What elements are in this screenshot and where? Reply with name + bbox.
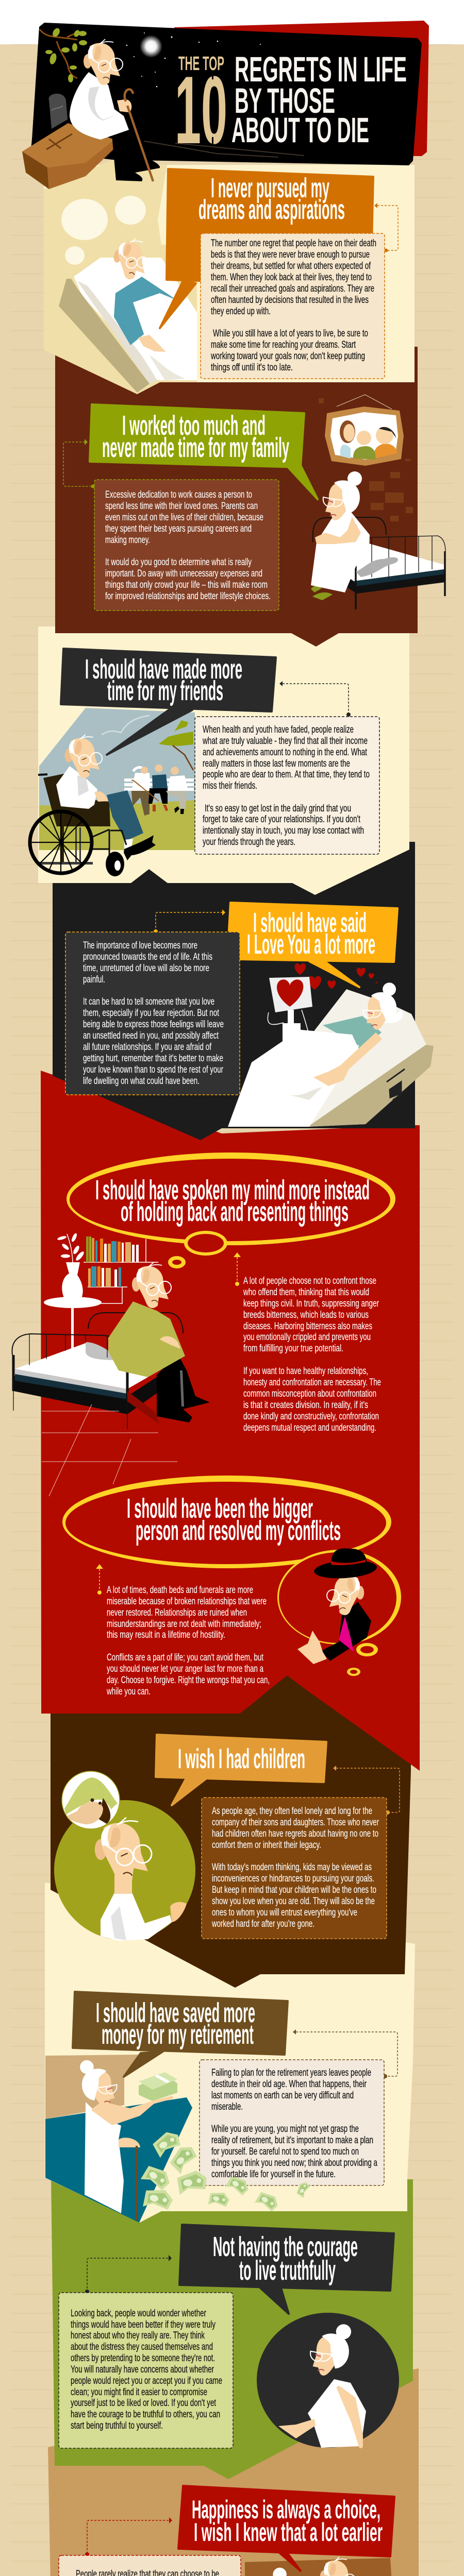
body text: The importance of love becomes more — [83, 940, 197, 951]
body text: things you think you need now; think about providing a — [211, 2158, 377, 2168]
body text: The number one regret that people have on their death — [211, 238, 376, 249]
stencil cuts in the number 10 — [212, 72, 213, 144]
regret 6 — [62, 1476, 401, 1697]
panel: regret 9 background — [51, 2177, 413, 2479]
floor lines — [42, 1404, 177, 1496]
thought bubble: regret 5 — [67, 1153, 395, 1268]
body text: Failing to plan for the retirement years leaves people — [211, 2067, 371, 2078]
body text: they ended up with. — [211, 306, 271, 317]
body text: Looking back, people would wonder whether — [71, 2308, 206, 2319]
regret 8: I should have saved more — [96, 1997, 255, 2028]
text box — [200, 2060, 384, 2185]
body text: beds is that they were never brave enough to pursue — [211, 249, 370, 260]
text box — [59, 2293, 233, 2448]
body text: others by pretending to be someone they're not. — [71, 2353, 215, 2364]
body text: time, unreturned of love will also be more — [83, 963, 209, 974]
body text: you emotionally crippled and prevents you — [243, 1332, 371, 1343]
body text: this may result in a lifetime of hostility. — [107, 1630, 225, 1640]
illustration: wall blocks — [245, 2558, 411, 2576]
body text: If you want to have healthy relationships, — [243, 1366, 368, 1377]
regret 1 — [59, 169, 398, 393]
body text: As people age, they often feel lonely and long for the — [212, 1806, 372, 1817]
regret 3: I should have made more — [85, 654, 242, 685]
speech bubble: regret 10 — [178, 2486, 394, 2571]
illustration: hospital bed — [228, 982, 434, 1127]
connector arrow — [96, 1564, 103, 1595]
regret 7 — [54, 1735, 400, 1941]
body text: things off until it's too late. — [211, 362, 293, 373]
text box — [195, 717, 379, 854]
body text: start being truthful to yourself. — [71, 2420, 163, 2431]
illustration: patient in bed — [59, 236, 197, 393]
heading: time for my friends — [107, 675, 223, 706]
body text: often haunted by decisions that resulted in the lives — [211, 295, 369, 306]
body text: making money. — [105, 535, 150, 546]
text box — [94, 480, 279, 611]
body text: inconveniences or hindrances to pursuing your goals. — [212, 1873, 374, 1884]
connector arrow — [333, 1766, 400, 1815]
body text: intentionally stay in touch, you may lose contact with — [203, 825, 364, 836]
body text: things would have been better if they were truly — [71, 2319, 216, 2330]
body text: comfort them or inherit their legacy. — [212, 1840, 321, 1851]
heading — [127, 1493, 341, 1546]
body text: day. Choose to forgive. Right the wrongs that you can, — [107, 1675, 270, 1686]
regret 7: I wish I had children — [178, 1743, 305, 1774]
body text: important. Do away with unnecessary expenses and — [105, 568, 262, 579]
body text — [202, 724, 370, 848]
text box — [65, 932, 240, 1095]
body text — [210, 238, 376, 373]
regret 8 — [45, 1992, 397, 2223]
body text: their dreams, but settled for what others expected of — [211, 261, 371, 272]
illustration: old couple on coffin — [225, 2557, 373, 2576]
text box — [202, 1798, 387, 1939]
speech bubble: regret 3 — [61, 649, 276, 755]
body text: life dwelling on what could have been. — [83, 1076, 200, 1087]
body text — [105, 489, 271, 602]
body text: last moments on earth can be very difficult and — [211, 2090, 354, 2101]
illustration: vase on table — [44, 1232, 102, 1352]
speech bubble: regret 4 — [229, 903, 397, 987]
illustration: man in wheelchair — [30, 735, 156, 876]
panel: header — [22, 21, 429, 189]
illustration: bookshelf — [84, 1236, 158, 1303]
body text: for improved relationships and better lifestyle choices. — [105, 591, 271, 602]
body text: When health and youth have faded, people realize — [203, 724, 354, 735]
body text: A lot of people choose not to confront those — [243, 1276, 376, 1286]
body text: for yourself. Be careful not to spend too much on — [211, 2146, 359, 2157]
connector arrow — [85, 2255, 172, 2294]
body text: reality of retirement, but it's important to make a plan — [211, 2135, 373, 2146]
illustration: stack of money — [139, 2072, 177, 2101]
body text: pronounced towards the end of life. At this — [83, 952, 212, 962]
panel: regret 1 background — [44, 160, 415, 394]
speech bubble: regret 1 — [160, 169, 373, 328]
body text: what are truly valuable - they find that all their income — [202, 736, 368, 747]
icon: tree branch — [40, 27, 87, 82]
body text: you should never let your anger last for more than a — [107, 1664, 263, 1674]
stars and ground — [126, 32, 304, 157]
body text: done kindly and constructively, confrontation — [243, 1411, 379, 1422]
body text: honest about who they really are. They think — [71, 2330, 205, 2341]
body text: misunderstandings are not dealt with immediately; — [107, 1619, 261, 1630]
icon: tombstone — [49, 94, 68, 129]
body text: It's so easy to get lost in the daily grind that you — [205, 803, 351, 814]
connector arrow — [234, 1252, 241, 1286]
body text: keep things civil. In truth, suppressing anger — [243, 1298, 379, 1309]
text box — [59, 2555, 241, 2576]
illustration: old woman holding money — [80, 2060, 172, 2221]
panel: regret 4 background — [53, 840, 415, 1140]
heading — [192, 2495, 383, 2547]
body text: It can be hard to tell someone that you love — [83, 996, 214, 1007]
regret 2 — [63, 395, 445, 611]
body text: getting hurt, remember that it's better to make — [83, 1053, 223, 1064]
title: THE TOP — [178, 53, 224, 75]
body text: comfortable life for yourself in the future. — [211, 2169, 336, 2180]
illustration: park scene — [39, 708, 195, 850]
body text: honesty and confrontation are necessary. The — [243, 1377, 381, 1388]
heading — [198, 173, 345, 225]
body text — [211, 1806, 379, 1929]
body text: had children often have regrets about having no one to — [212, 1828, 378, 1839]
body text — [71, 2308, 222, 2431]
connector arrow — [293, 2029, 397, 2078]
connector arrow — [154, 909, 225, 934]
body text: yourself just to be liked or loved. If you don't yet — [71, 2398, 217, 2409]
panel: regret 3 background — [38, 626, 409, 895]
body text: your love known than to spend the rest of your — [83, 1064, 223, 1075]
body text: You will naturally have concerns about whether — [71, 2364, 214, 2375]
body text: It would do you good to determine what is really — [105, 557, 252, 568]
speech bubble: regret 2 — [90, 404, 318, 499]
speech bubble: regret 8 — [73, 1992, 288, 2077]
illustration: old man on coffin — [70, 39, 160, 181]
body text: miserable because of broken relationships that were — [107, 1596, 267, 1607]
body text: and achievements amount to nothing in the end. What — [203, 747, 367, 758]
title — [175, 49, 407, 164]
body text: about the distress they caused themselves and — [71, 2342, 213, 2352]
body text — [83, 940, 224, 1087]
panel: regrets 5 and 6 background — [41, 1071, 420, 1771]
illustration: falling bills — [140, 2128, 312, 2214]
connector arrow — [279, 681, 351, 717]
body text: breeds bitterness, which leads to various — [243, 1310, 369, 1320]
illustration: sad old woman — [311, 471, 370, 600]
title: 10 — [175, 56, 227, 164]
heading — [213, 2231, 358, 2286]
body text: people would reject you or accept you if you came — [71, 2376, 222, 2386]
heading: I worked too much and — [122, 410, 266, 441]
body text: painful. — [83, 974, 105, 985]
body text: things that only crowd your life – this will make room — [105, 580, 268, 590]
regret 3 — [30, 649, 379, 876]
body text: spend less time with their loved ones. Parents can — [105, 501, 258, 512]
body text: have the courage to be truthful to others, you can — [71, 2409, 220, 2420]
body text: them, especially if you fear rejection. But not — [83, 1008, 220, 1019]
panel: regret 2 background — [55, 340, 418, 647]
heading — [102, 410, 289, 463]
illustration: family portrait — [325, 395, 404, 466]
body text: Conflicts are a part of life; you can't avoid them, but — [107, 1652, 264, 1663]
body text — [106, 1585, 270, 1697]
regret 5 — [12, 1153, 395, 1496]
body text — [243, 1276, 381, 1433]
panel: regret 8 background — [45, 1883, 415, 2223]
body text: while you can. — [106, 1686, 151, 1697]
speech bubble: regret 7 — [156, 1735, 326, 1805]
body text: being able to express those feelings will leave — [83, 1019, 224, 1030]
heading: I never pursued my — [211, 173, 329, 204]
body text: recall their unreached goals and aspirations. They are — [211, 283, 374, 294]
body text: even miss out on the lives of their children, because — [105, 512, 263, 523]
illustration: wall bricks — [319, 398, 413, 521]
body text: But keep in mind that your children will be the ones to — [212, 1885, 376, 1895]
body text: make some time for reaching your dreams. Start — [211, 340, 356, 350]
body text: working toward your goals now; don't keep putting — [210, 351, 365, 362]
body text: While you still have a lot of years to live, be sure to — [213, 328, 368, 339]
title: BY THOSE — [235, 81, 335, 121]
body text: deepens mutual respect and understanding. — [243, 1422, 376, 1433]
regret 10 — [31, 2486, 432, 2576]
body text: destitute in their old age. When that happens, their — [211, 2079, 367, 2090]
body text: never restored. Relationships are ruined when — [107, 1607, 247, 1618]
illustration: hearts — [295, 963, 377, 990]
panel: regret 7 background — [51, 1669, 411, 1988]
illustration: heart monitor — [268, 977, 312, 1036]
heading — [85, 654, 242, 706]
body text: an unsettled need in you, and possibly affect — [83, 1030, 219, 1041]
body text: worked hard for after you're gone. — [211, 1919, 314, 1929]
text box — [201, 233, 385, 379]
body text — [211, 2067, 377, 2180]
body text: from fulfilling your true potential. — [243, 1343, 343, 1354]
body text: show you love when you are old. They will also be the — [212, 1896, 375, 1907]
body text: who offend them, thinking that this would — [243, 1287, 369, 1298]
body text: miss their friends. — [203, 781, 257, 791]
body text: miserable. — [211, 2102, 243, 2112]
body text: While you are young, you might not yet grasp the — [211, 2124, 359, 2134]
body text: your friends through the years. — [203, 837, 295, 848]
body text: Excessive dedication to work causes a person to — [105, 489, 252, 500]
illustration: bed — [313, 517, 445, 609]
illustration: coffin — [22, 123, 114, 189]
panel: regret 10 background — [48, 2368, 419, 2576]
body text: company of their sons and daughters. Those who never — [212, 1817, 379, 1828]
speech bubble: regret 9 — [179, 2225, 394, 2314]
body text: A lot of times, death beds and funerals are more — [107, 1585, 253, 1596]
body text: diseases. Harboring bitterness also makes — [243, 1321, 372, 1332]
connector arrow — [85, 2517, 172, 2556]
body text: clean; you might find it easier to compromise — [71, 2387, 207, 2398]
body text: they spent their best years pursuing careers and — [105, 523, 252, 534]
body text: forget to take care of your relationships. If you don't — [203, 814, 361, 825]
illustration: man on bed — [12, 1262, 210, 1429]
connector arrow — [63, 439, 95, 488]
body text: really matters in those last few moments are the — [203, 758, 350, 769]
heading — [96, 1997, 255, 2050]
heading — [247, 907, 375, 960]
regret 4 — [65, 903, 434, 1127]
body text: common misconception about confrontation — [243, 1388, 376, 1399]
body text: ones to whom you will entrust everything you've — [212, 1907, 357, 1918]
body text: them. When they look back at their lives, they tend to — [211, 272, 372, 283]
illustration: man with hat and thumbs up — [297, 1548, 377, 1664]
regret 8: money for my retirement — [102, 2019, 254, 2050]
heading: to live truthfully — [239, 2255, 336, 2286]
body text: is that it creates division. In reality, if it's — [243, 1400, 368, 1411]
body text: all future relationships. If you are afraid of — [83, 1042, 212, 1053]
thought bubble: regret 6 — [62, 1476, 401, 1676]
connector arrow — [374, 203, 398, 252]
heading — [95, 1175, 370, 1227]
illustration: old man in green circle — [54, 1771, 195, 1941]
body text: With today's modern thinking, kids may be viewed as — [212, 1862, 372, 1873]
illustration: wall and armchair — [45, 2055, 192, 2223]
icon: thought bubbles — [61, 196, 146, 265]
icon: moon — [140, 35, 162, 58]
regret 9 — [59, 2225, 399, 2448]
body text: people who are dear to them. At that time, they tend to — [203, 769, 370, 780]
illustration: old woman in dark circle — [257, 2313, 399, 2448]
